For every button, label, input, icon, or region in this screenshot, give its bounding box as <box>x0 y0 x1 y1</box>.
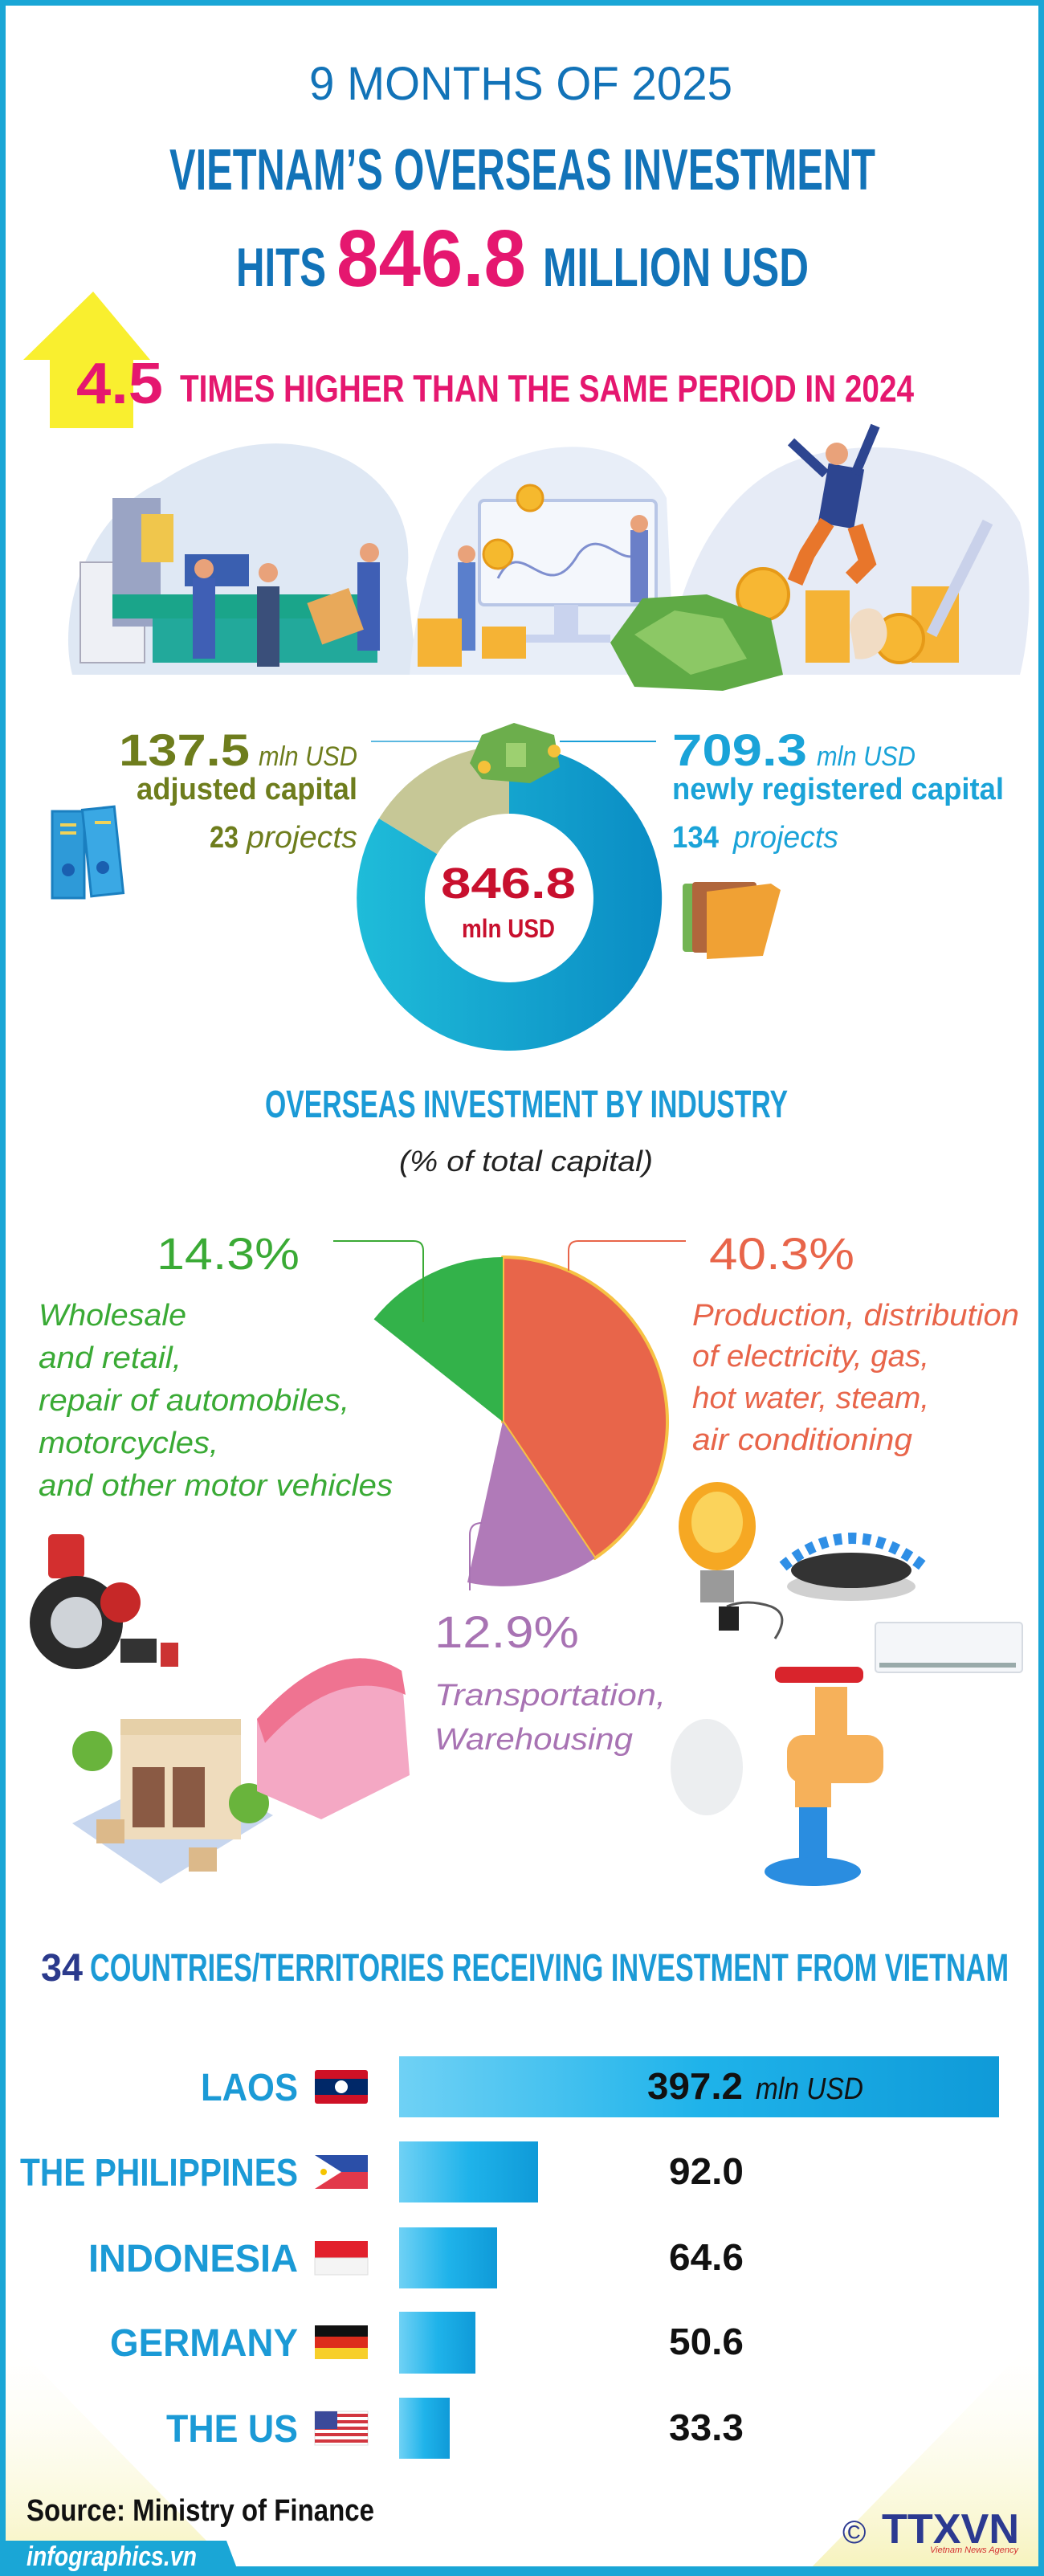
label: newly registered capital: 134 <box>672 821 719 855</box>
label: wholesale 14.3%: and other motor vehicles <box>39 1469 393 1503</box>
logo: TTXVN: Vietnam News Agency <box>930 2545 1019 2555</box>
leader lines <box>371 741 656 742</box>
label: adjusted capital <box>119 725 357 855</box>
heading: industry: (% of total capital) <box>399 1145 653 1178</box>
bar: Germany: 50.6 <box>669 2321 744 2362</box>
label: electricity 40.3%: Production, distribution <box>692 1299 1019 1333</box>
label: wholesale 14.3%: Wholesale <box>39 1299 186 1333</box>
label: electricity 40.3%: hot water, steam, <box>692 1382 929 1415</box>
bar: US: 33.3 <box>669 2407 744 2448</box>
monitor <box>479 500 656 605</box>
bar: US: THE US <box>166 2408 298 2451</box>
icon: water tap <box>671 1667 883 1886</box>
bar: Indonesia <box>88 2227 744 2288</box>
icon: gas stove <box>783 1538 924 1601</box>
label: newly registered capital: projects <box>732 821 838 855</box>
title: 9 MONTHS OF 2025 <box>309 58 732 110</box>
bar: Germany: GERMANY <box>110 2322 298 2365</box>
label: adjusted capital: 23 <box>210 821 239 855</box>
bar: Laos: LAOS <box>201 2067 298 2109</box>
logo: TTXVN: TTXVN <box>882 2506 1019 2553</box>
title <box>169 58 875 304</box>
icon: air conditioner <box>875 1623 1022 1672</box>
icon: light bulb <box>679 1482 782 1639</box>
label: transportation 12.9%: Transportation, <box>434 1679 666 1713</box>
machine <box>80 562 145 663</box>
label: adjusted capital: mln USD <box>259 741 357 772</box>
label: wholesale 14.3%: 14.3% <box>157 1228 300 1279</box>
label: newly registered capital: mln USD <box>817 741 916 772</box>
bar chart: countries <box>20 2056 999 2459</box>
donut center value <box>441 859 576 943</box>
jumping man <box>818 463 864 529</box>
footer: infographics.vn: infographics.vn <box>27 2541 197 2572</box>
label: wholesale 14.3%: motorcycles, <box>39 1427 218 1460</box>
icon: folders <box>683 882 781 959</box>
title: 846.8 <box>336 214 526 304</box>
bar: Laos: mln USD <box>756 2072 863 2106</box>
source: Source: Ministry of Finance <box>27 2494 374 2528</box>
icon: yellow up arrow <box>23 292 150 428</box>
donut chart: capital <box>357 745 662 1051</box>
label: electricity 40.3% <box>692 1228 1028 1457</box>
bar: Laos: 397.2 <box>647 2065 743 2107</box>
workers <box>193 578 215 659</box>
bar: US <box>166 2398 744 2459</box>
icon: binders <box>52 806 124 898</box>
footer: infographics.vn <box>0 2541 1044 2576</box>
money pile <box>610 594 783 691</box>
bar: Indonesia: 64.6 <box>669 2236 744 2278</box>
bar: Philippines: THE PHILIPPINES <box>20 2152 298 2194</box>
coin stacks <box>418 618 462 667</box>
label: electricity 40.3%: of electricity, gas, <box>692 1340 929 1374</box>
bar: Philippines <box>20 2141 744 2202</box>
label: transportation 12.9%: Warehousing <box>434 1723 633 1757</box>
label: newly registered capital <box>672 725 1004 855</box>
label: adjusted capital: adjusted capital <box>137 773 357 806</box>
illustration: factory and investors <box>68 426 1030 691</box>
label: adjusted capital: 137.5 <box>119 725 250 775</box>
icon: warehouses <box>72 1658 410 1884</box>
label: newly registered capital: newly registered capital <box>672 773 1004 806</box>
label: wholesale 14.3%: and retail, <box>39 1341 181 1375</box>
heading: industry <box>265 1084 788 1178</box>
growth subtitle <box>76 352 914 416</box>
label: transportation 12.9% <box>434 1606 675 1757</box>
label: electricity 40.3%: 40.3% <box>709 1228 854 1279</box>
pie chart: industry <box>374 1257 667 1586</box>
donut center value: 846.8 <box>441 859 576 908</box>
heading: countries: 34 <box>41 1947 83 1990</box>
label: adjusted capital: projects <box>246 821 357 855</box>
label: electricity 40.3%: air conditioning <box>692 1423 912 1457</box>
label: transportation 12.9%: 12.9% <box>434 1606 579 1657</box>
leader lines: pie <box>333 1241 686 1590</box>
growth subtitle: 4.5 <box>76 352 163 416</box>
icon: motor parts <box>30 1534 178 1669</box>
heading: industry: OVERSEAS INVESTMENT BY INDUSTRY <box>265 1084 788 1126</box>
bar: Indonesia: INDONESIA <box>88 2238 298 2280</box>
title: MILLION USD <box>543 237 809 298</box>
label: newly registered capital: 709.3 <box>672 725 807 775</box>
title: HITS <box>236 237 326 298</box>
label: wholesale 14.3%: repair of automobiles, <box>39 1384 349 1418</box>
logo: TTXVN: © <box>842 2515 866 2550</box>
bar: Germany <box>110 2312 744 2374</box>
icon: money on donut <box>470 723 561 783</box>
bar: Laos <box>201 2056 999 2117</box>
label: wholesale 14.3% <box>39 1228 393 1503</box>
bar: Philippines: 92.0 <box>669 2150 744 2192</box>
donut center value: mln USD <box>462 914 555 943</box>
